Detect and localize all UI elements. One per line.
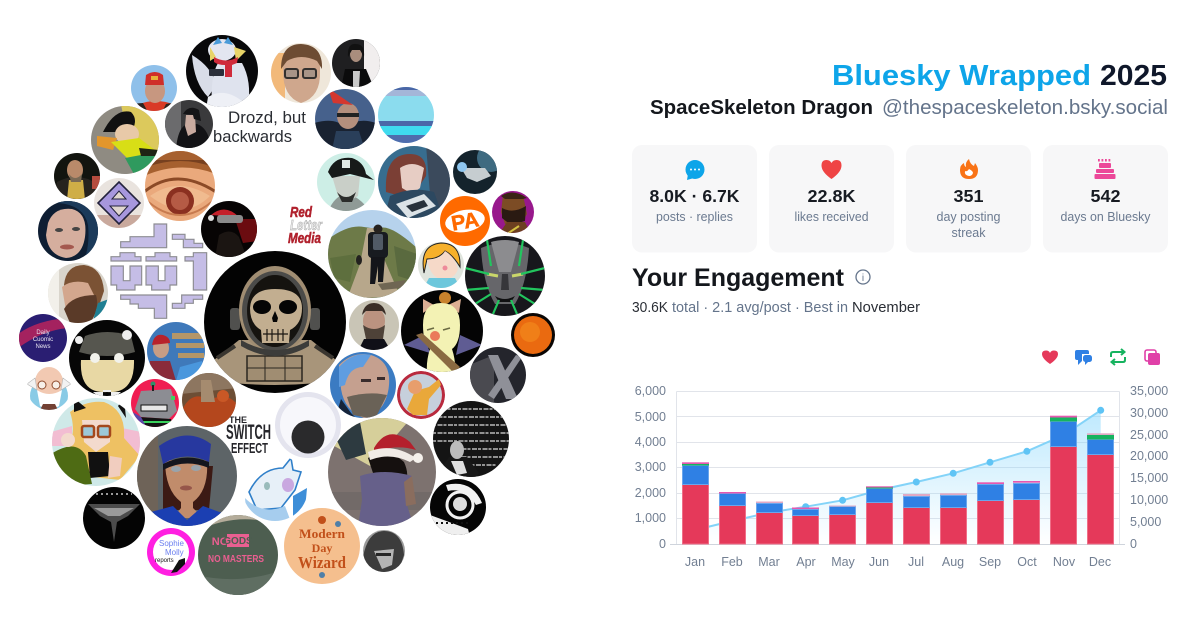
avatar: white dragon with scarf bbox=[185, 34, 259, 109]
avatar: 3D character in blue cap bbox=[136, 425, 238, 527]
avatar: blonde girl with glasses bbox=[51, 397, 141, 487]
avatar: man in red hat by a signpost bbox=[146, 321, 206, 381]
avatar: Red Letter Media logo: Letter bbox=[290, 217, 323, 234]
avatar: yellow cartoon bbox=[90, 105, 160, 176]
avatar: bearded man on magenta bbox=[491, 190, 535, 234]
header: display name and handle: SpaceSkeleton Dragon bbox=[650, 97, 873, 119]
left axis labels: 3,000 bbox=[635, 460, 666, 474]
avatar: bearded man smiling bbox=[47, 262, 109, 324]
left axis labels: 1,000 bbox=[635, 511, 666, 525]
avatar: green NO GODS NO MASTERS hat: GODS bbox=[223, 536, 253, 547]
panel: days on Bluesky bbox=[1043, 145, 1168, 252]
header: title: Bluesky Wrapped bbox=[832, 60, 1091, 92]
avatar: The Switch Effect logo: THE bbox=[229, 415, 247, 425]
avatar: orange monster painting bbox=[181, 372, 237, 428]
avatar: comic portrait in cap bbox=[316, 152, 376, 212]
icon: birthday cake bbox=[1094, 159, 1116, 179]
stat label bbox=[936, 210, 1001, 240]
month labels: Mar bbox=[758, 555, 780, 569]
panel: day posting streak bbox=[906, 145, 1031, 252]
stat label: day posting bbox=[936, 210, 1001, 224]
icon: reposts arrows bbox=[1111, 349, 1125, 365]
avatar: Modern Day Wizard logo bbox=[283, 507, 361, 585]
icon: chat bubble bbox=[686, 160, 704, 180]
avatar: skeleton astronaut (main profile picture) bbox=[203, 250, 347, 394]
avatar: Red Letter Media logo: Media bbox=[288, 230, 321, 247]
left axis labels bbox=[635, 384, 666, 551]
avatar: woman in santa hat bbox=[327, 417, 437, 527]
engagement summary: total · 2.1 avg/post · Best in bbox=[672, 300, 848, 316]
icon: replies chat bubbles bbox=[1075, 350, 1092, 365]
legend bbox=[1042, 349, 1160, 365]
grid lines bbox=[676, 392, 1120, 544]
avatar: the sun bbox=[510, 312, 556, 358]
avatar name text: Drozd, but backwards: Drozd, but bbox=[228, 108, 306, 127]
avatar: googly eye bbox=[275, 392, 341, 458]
cumulative area bbox=[695, 410, 1101, 544]
avatar: octopus skull emblem bbox=[429, 478, 487, 537]
avatar: Sophie Molly reports: Sophie bbox=[159, 539, 184, 548]
chart: monthly engagement stacked bars with cumulative line bbox=[635, 384, 1168, 569]
right axis labels: 0 bbox=[1130, 537, 1137, 551]
avatar: Sophie Molly reports: Molly bbox=[165, 548, 184, 557]
avatar: PA logo: PA bbox=[450, 208, 481, 236]
avatar: Modern Day Wizard logo: Modern bbox=[299, 526, 346, 541]
avatar: robot on red bbox=[130, 378, 180, 428]
avatar: black emblem bbox=[82, 486, 146, 550]
avatar: cartoon boy with orange hair bbox=[417, 241, 465, 289]
avatar: The Switch Effect logo bbox=[226, 415, 271, 457]
month labels: May bbox=[831, 555, 856, 569]
header: display name and handle: @thespaceskeleton.bsky.social bbox=[882, 97, 1168, 119]
avatar: Red Letter Media logo bbox=[288, 204, 323, 247]
avatar: lilac glyph logo bbox=[111, 224, 207, 318]
reposts (green) bbox=[682, 418, 1114, 488]
avatar: green NO GODS NO MASTERS hat: NO bbox=[212, 536, 229, 548]
left axis labels: 4,000 bbox=[635, 435, 666, 449]
avatar: bearded man in black shirt bbox=[348, 299, 400, 351]
avatar: Modern Day Wizard logo: Day bbox=[312, 541, 332, 555]
avatar: Sophie Molly reports: reports bbox=[155, 558, 174, 564]
right axis labels: 30,000 bbox=[1130, 406, 1168, 420]
month labels bbox=[685, 555, 1111, 569]
month labels: Sep bbox=[979, 555, 1001, 569]
quotes (pink) bbox=[682, 416, 1114, 509]
panel: posts and replies bbox=[632, 145, 757, 252]
avatar: dark portrait bbox=[164, 99, 214, 149]
avatar: Sophie Molly reports bbox=[146, 527, 196, 577]
month labels: Nov bbox=[1053, 555, 1076, 569]
icon: likes heart bbox=[1042, 350, 1058, 364]
month labels: Apr bbox=[796, 555, 816, 569]
avatar: anime heroine bbox=[377, 145, 451, 219]
avatar name text: Drozd, but backwards bbox=[213, 108, 306, 146]
heading: Your Engagement: Your Engagement bbox=[632, 264, 845, 292]
replies (blue) bbox=[682, 422, 1114, 516]
left axis labels: 5,000 bbox=[635, 410, 666, 424]
stat value: 8.0K · 6.7K bbox=[650, 186, 740, 206]
avatar: purple diamond badge bbox=[93, 177, 145, 229]
engagement summary: 30.6K bbox=[632, 300, 668, 316]
cumulative line bbox=[695, 407, 1104, 530]
stat label: likes received bbox=[794, 210, 869, 224]
avatar: The Switch Effect logo: SWITCH bbox=[226, 421, 271, 444]
avatar name text: Drozd, but backwards: backwards bbox=[213, 127, 292, 146]
month labels: Feb bbox=[721, 555, 743, 569]
avatar: The Switch Effect logo: EFFECT bbox=[231, 440, 268, 457]
avatar: green NO GODS NO MASTERS hat bbox=[197, 514, 279, 596]
avatar: Daily Cuomic News: Daily bbox=[36, 330, 50, 336]
engagement summary bbox=[632, 300, 920, 316]
avatar: spaceship bbox=[453, 150, 497, 194]
avatar: bald old man with white beard bbox=[27, 367, 71, 410]
stacked bars bbox=[682, 416, 1114, 544]
avatar: man in black jacket bbox=[331, 38, 381, 88]
month labels: Jan bbox=[685, 555, 705, 569]
month labels: Jul bbox=[908, 555, 924, 569]
avatar: light blue stripes bbox=[377, 86, 435, 144]
avatar: SHODAN green-lined face bbox=[464, 235, 546, 317]
header: display name and handle bbox=[650, 97, 1168, 119]
right axis labels: 10,000 bbox=[1130, 493, 1168, 507]
stat value: 351 bbox=[954, 186, 984, 206]
avatar: man with glasses bbox=[270, 42, 332, 104]
left axis labels: 6,000 bbox=[635, 384, 666, 398]
header: title: 2025 bbox=[1100, 60, 1167, 92]
stat value: 542 bbox=[1090, 186, 1121, 206]
avatar: bald man with beard bbox=[329, 351, 397, 419]
avatar: dark figure with santa hat bbox=[200, 200, 258, 258]
avatar: close-up eye bbox=[144, 150, 216, 222]
avatar: figure with red scalloped edge bbox=[397, 371, 445, 419]
icon: flame bbox=[960, 159, 978, 179]
avatar: green NO GODS NO MASTERS hat: NO MASTERS bbox=[208, 554, 264, 565]
avatar: Daily Cuomic News: Cuomic bbox=[33, 337, 53, 343]
right axis labels: 20,000 bbox=[1130, 449, 1168, 463]
avatar: blue and white dragon bbox=[241, 454, 309, 522]
icon: info: i bbox=[862, 273, 864, 284]
month labels: Oct bbox=[1017, 555, 1037, 569]
stat label: days on Bluesky bbox=[1060, 210, 1151, 224]
right axis labels: 35,000 bbox=[1130, 384, 1168, 398]
right axis labels: 5,000 bbox=[1130, 515, 1161, 529]
stat label: streak bbox=[952, 226, 986, 240]
avatar: blue-haired woman bbox=[37, 200, 99, 262]
avatar: older man in party hat bbox=[314, 88, 376, 150]
engagement summary: November bbox=[852, 300, 920, 316]
avatar: Red Letter Media logo: Red bbox=[290, 204, 313, 221]
avatar: The X-Files bbox=[469, 346, 527, 404]
avatar: hiker on a dune path bbox=[327, 209, 417, 299]
avatar: Modern Day Wizard logo: Wizard bbox=[298, 553, 346, 572]
stat value: 22.8K bbox=[808, 186, 856, 206]
avatar: moogle bbox=[400, 289, 484, 373]
icon: quotes copies bbox=[1145, 350, 1160, 365]
month labels: Jun bbox=[869, 555, 889, 569]
right axis labels: 15,000 bbox=[1130, 471, 1168, 485]
avatar: bearded man on dark bbox=[53, 152, 101, 200]
likes (red) bbox=[682, 446, 1114, 544]
panel: likes received bbox=[769, 145, 894, 252]
avatar: Daily Cuomic News: News bbox=[35, 344, 51, 350]
icon: heart bbox=[822, 160, 842, 179]
stat label: posts · replies bbox=[656, 210, 733, 224]
avatar: man among handwritten equations bbox=[432, 400, 510, 478]
right axis labels bbox=[1130, 384, 1168, 551]
left axis labels: 2,000 bbox=[635, 486, 666, 500]
right axis labels: 25,000 bbox=[1130, 428, 1168, 442]
month labels: Dec bbox=[1089, 555, 1111, 569]
left axis labels: 0 bbox=[659, 537, 666, 551]
avatar: monochrome manga character bbox=[362, 529, 406, 573]
avatar: Daily Cuomic News bbox=[18, 313, 68, 363]
month labels: Aug bbox=[942, 555, 964, 569]
icon: info bbox=[856, 270, 870, 284]
avatar: red cap man bbox=[131, 65, 177, 111]
avatar: grumpy cartoon man bbox=[68, 319, 146, 397]
avatar: PA logo bbox=[439, 195, 491, 247]
avatar cluster bbox=[18, 34, 556, 596]
